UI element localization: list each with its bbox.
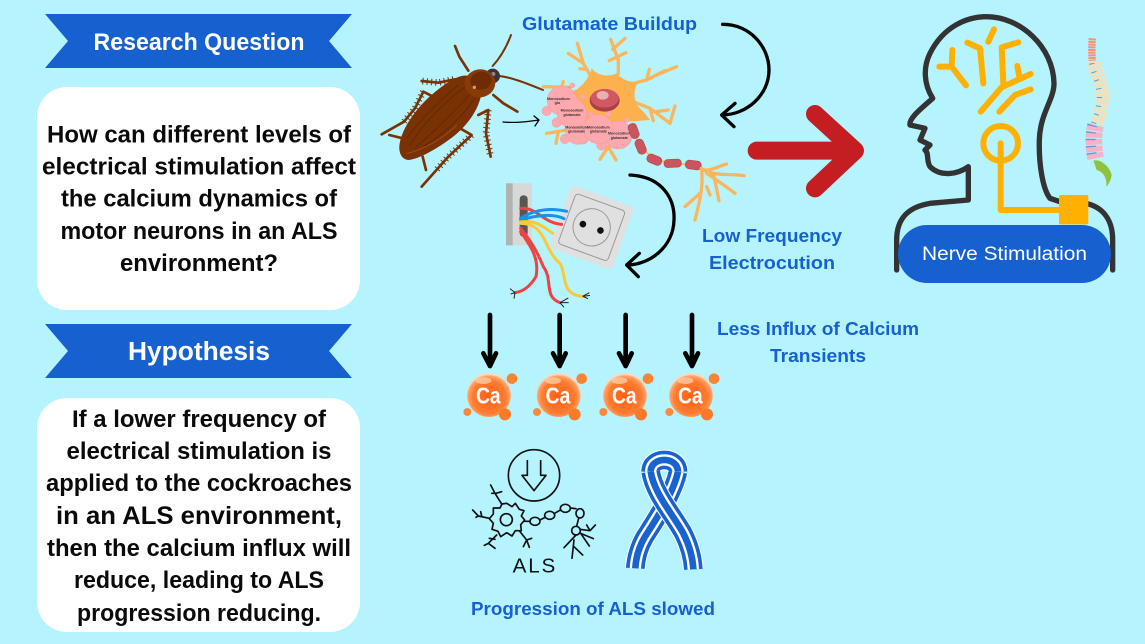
icon: neuron with glutamate: Monosodium bbox=[547, 97, 570, 101]
arrow: cockroach to neuron bbox=[503, 116, 539, 126]
icon: head with nerve stimulation bbox=[897, 17, 1113, 270]
icon: neuron with glutamate: glu bbox=[555, 101, 560, 105]
panel: hypothesis: applied to the cockroaches bbox=[46, 470, 352, 497]
icon: neuron with glutamate: Monosodium bbox=[608, 132, 631, 136]
icon: neuron with glutamate: Monosodium bbox=[587, 125, 610, 129]
pill: Nerve Stimulation bbox=[898, 225, 1111, 283]
panel: hypothesis: reduce, leading to ALS bbox=[74, 567, 324, 594]
icons: calcium spheres: Ca bbox=[546, 382, 571, 408]
icon: ALS neuron with down arrow bbox=[473, 450, 595, 578]
icon: neuron with glutamate: glutamate bbox=[563, 113, 581, 117]
banner: Hypothesis bbox=[45, 324, 352, 378]
red arrow bbox=[757, 114, 855, 188]
panel: research question: How can different levels of bbox=[47, 122, 352, 148]
icon: neuron with glutamate: Monosodium bbox=[565, 125, 589, 129]
icon: neuron with glutamate: glutamate bbox=[590, 129, 607, 133]
label: Low Frequency Electrocution: Electrocution bbox=[709, 253, 835, 273]
panel: hypothesis: in an ALS environment, bbox=[56, 502, 342, 530]
arrow: curved middle bbox=[627, 175, 674, 277]
icon: neuron with glutamate: glutamate bbox=[568, 130, 585, 134]
panel: research question: motor neurons in an ALS bbox=[60, 218, 338, 245]
arrows: four down arrows bbox=[483, 315, 698, 366]
icons: calcium spheres: Ca bbox=[476, 382, 502, 408]
banner: Research Question: Research Question bbox=[94, 29, 304, 56]
label: Less Influx of Calcium Transients bbox=[717, 319, 919, 366]
label: Low Frequency Electrocution: Low Frequency bbox=[702, 226, 842, 246]
icon: spine bbox=[1091, 38, 1112, 187]
label: Glutamate Buildup: Glutamate Buildup bbox=[522, 14, 697, 34]
banner: Research Question bbox=[45, 14, 352, 68]
label: Less Influx of Calcium Transients: Less Influx of Calcium bbox=[717, 319, 919, 339]
icon: ALS neuron with down arrow: ALS bbox=[513, 555, 555, 578]
panel: research question bbox=[37, 87, 360, 310]
panel: research question: the calcium dynamics of bbox=[61, 186, 338, 212]
icon: neuron with glutamate bbox=[542, 38, 744, 220]
panel: hypothesis bbox=[37, 398, 360, 632]
icon: socket with wires bbox=[506, 183, 634, 307]
icon: neuron with glutamate: Monosodium bbox=[561, 109, 584, 113]
pill: Nerve Stimulation: Nerve Stimulation bbox=[922, 244, 1087, 265]
label: Less Influx of Calcium Transients: Transients bbox=[770, 346, 866, 366]
banner: Hypothesis: Hypothesis bbox=[128, 338, 270, 366]
icon: cockroach bbox=[382, 35, 543, 187]
label: Low Frequency Electrocution bbox=[702, 226, 842, 273]
panel: hypothesis: progression reducing. bbox=[77, 600, 321, 627]
panel: research question: electrical stimulation affect bbox=[42, 154, 356, 180]
panel: hypothesis: electrical stimulation is bbox=[66, 438, 332, 465]
icons: calcium spheres: Ca bbox=[678, 382, 704, 408]
icons: calcium spheres bbox=[463, 373, 719, 420]
arrow: curved top bbox=[722, 24, 769, 127]
icon: awareness ribbon bbox=[635, 460, 693, 569]
panel: research question: environment? bbox=[120, 250, 278, 277]
label: Progression of ALS slowed: Progression of ALS slowed bbox=[471, 599, 715, 619]
icons: calcium spheres: Ca bbox=[612, 382, 638, 408]
panel: hypothesis: If a lower frequency of bbox=[72, 406, 327, 433]
icon: neuron with glutamate: glutamate bbox=[611, 136, 628, 140]
panel: hypothesis: then the calcium influx will bbox=[47, 535, 351, 562]
